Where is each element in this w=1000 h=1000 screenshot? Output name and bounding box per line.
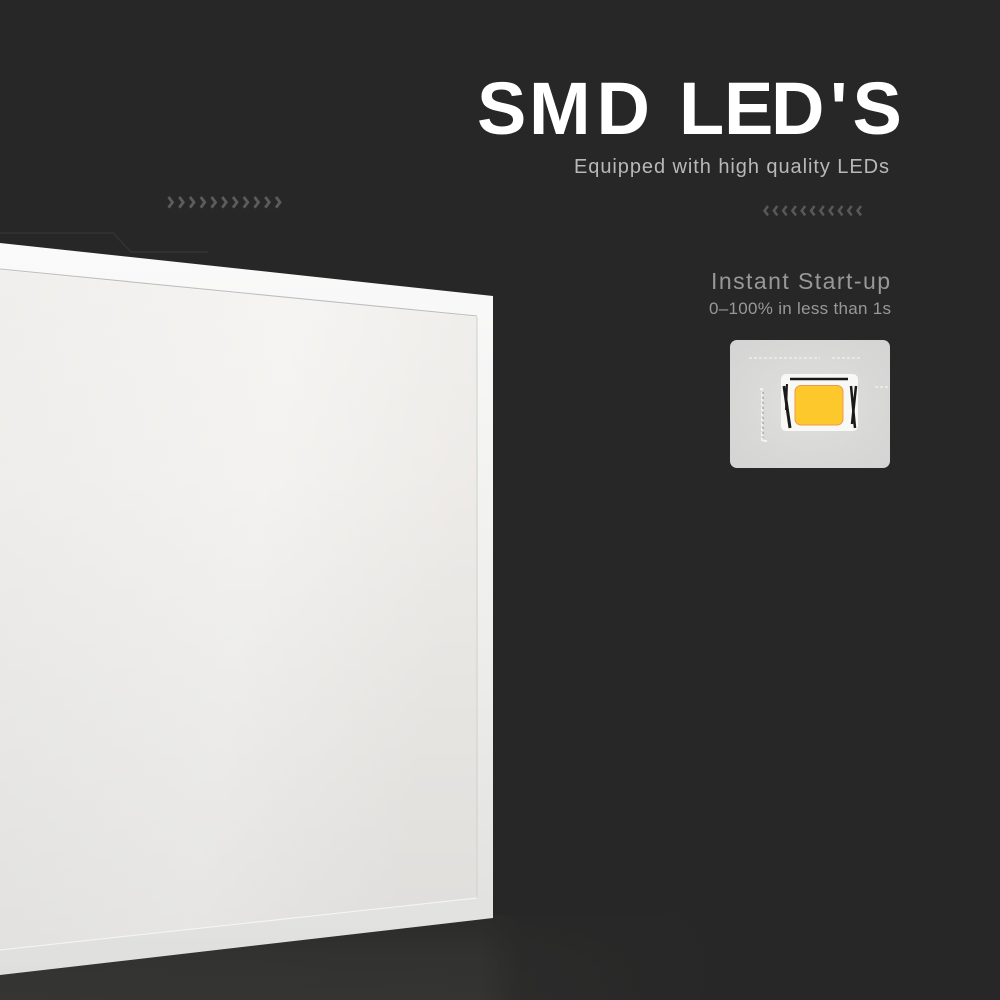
floor glow <box>0 915 1000 1000</box>
board traces <box>749 358 888 387</box>
chevrons pointing right <box>168 197 280 208</box>
board bracket <box>760 389 768 441</box>
chip dark outline <box>784 379 856 428</box>
subtitle: Equipped with high quality LEDs <box>574 156 889 178</box>
circuit line decoration <box>0 233 208 252</box>
chip board <box>730 340 890 468</box>
panel light surface <box>0 270 477 950</box>
chip housing <box>781 374 858 431</box>
panel inner edge <box>0 269 477 950</box>
feature heading: Instant Start-up <box>711 268 890 294</box>
feature detail: 0–100% in less than 1s <box>709 299 891 318</box>
yellow phosphor <box>795 386 843 425</box>
LED chip photo <box>730 340 890 468</box>
chevrons pointing left <box>764 206 861 215</box>
LED panel <box>0 243 493 975</box>
title: SMD LED'S <box>477 67 902 150</box>
panel frame <box>0 243 493 975</box>
